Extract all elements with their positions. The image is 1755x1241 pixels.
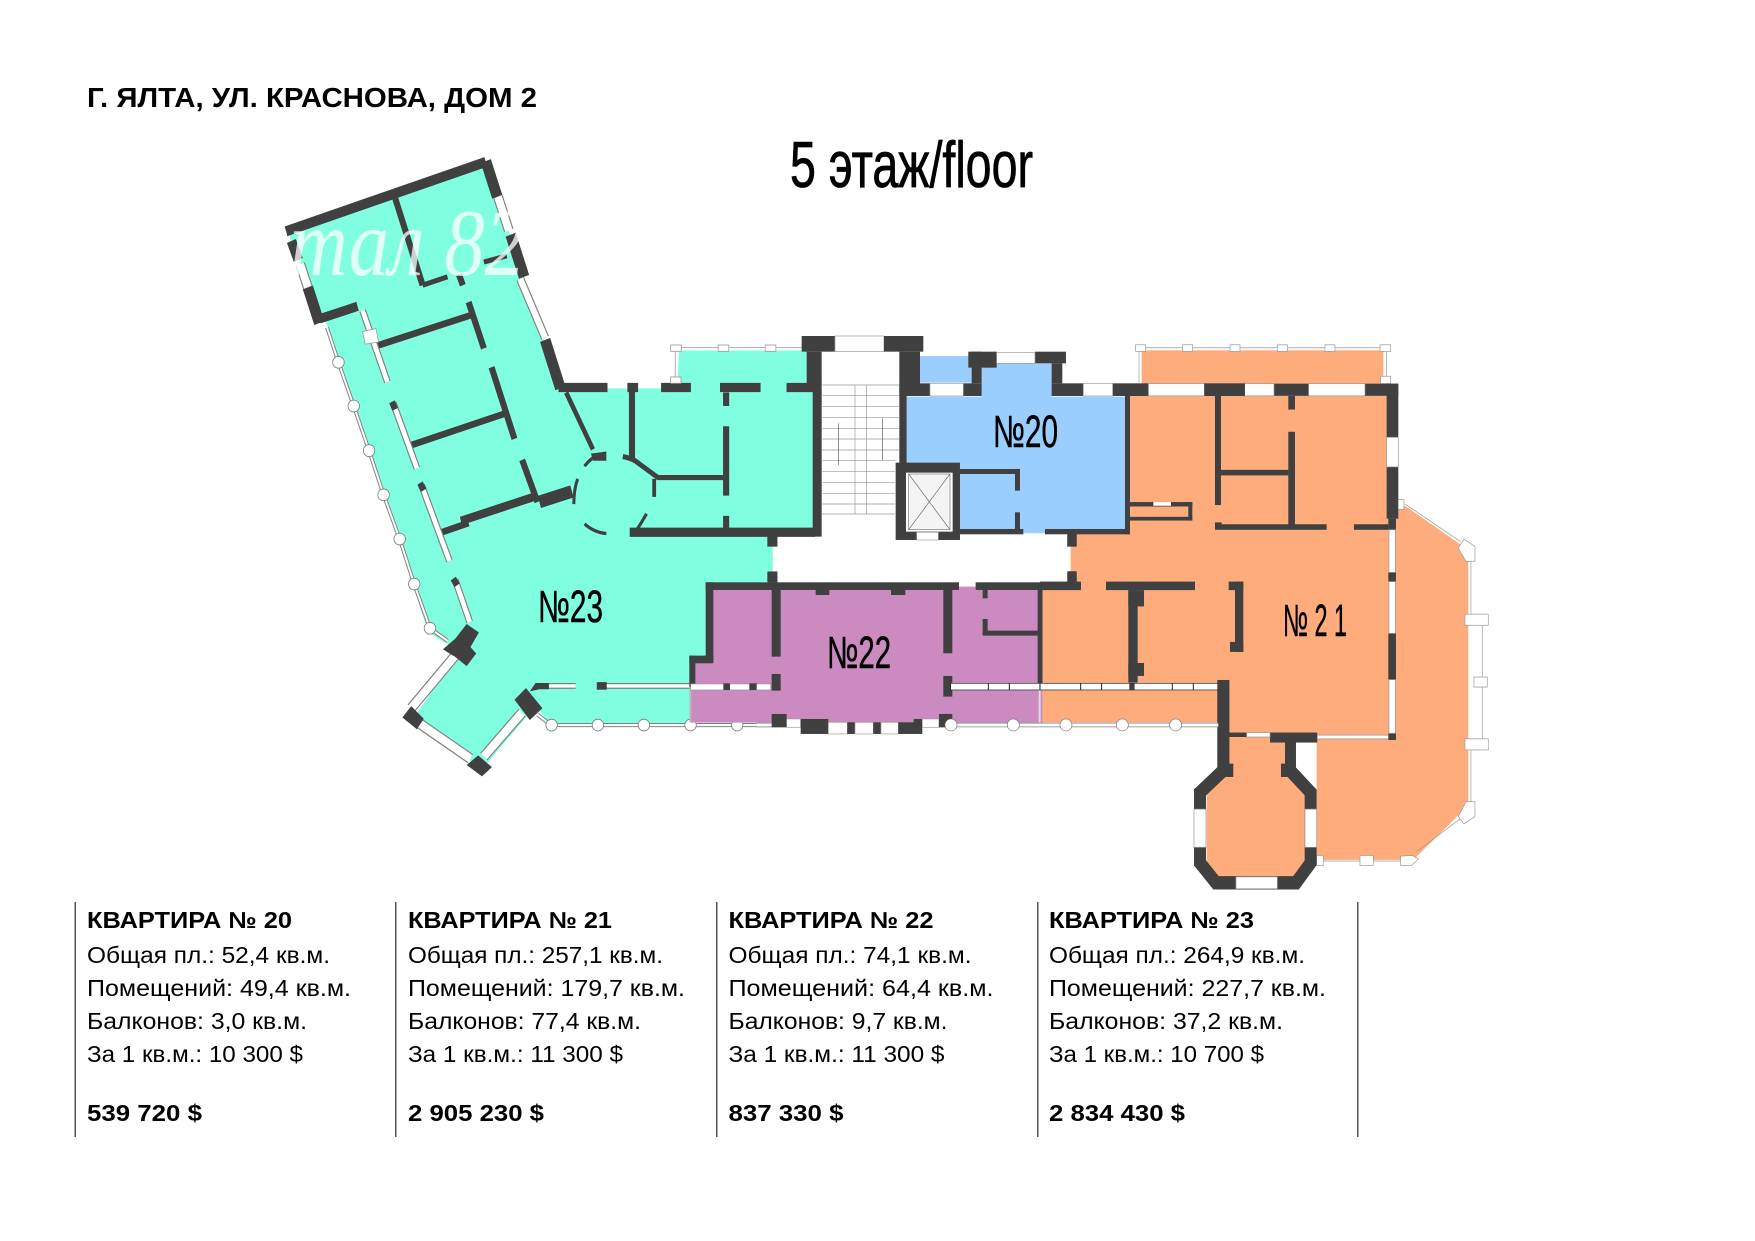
panel: apartment 23: Общая пл.: 264,9 кв.м. [1049, 942, 1305, 968]
bay window piers [402, 624, 549, 776]
panel: apartment 23: Балконов: 37,2 кв.м. [1049, 1008, 1283, 1034]
balcony railing with columns [327, 327, 773, 731]
corridor windows [691, 535, 1229, 770]
panel: apartment 20: За 1 кв.м.: 10 300 $ [87, 1041, 303, 1067]
terrace railing [1136, 345, 1488, 865]
panel: apartment 20: Балконов: 3,0 кв.м. [87, 1008, 307, 1034]
windows: apartment 23 [300, 197, 691, 759]
panel: apartment 22: Помещений: 64,4 кв.м. [728, 975, 994, 1001]
apartment 22 plan [689, 537, 1081, 723]
panel: apartment 23: За 1 кв.м.: 10 700 $ [1049, 1041, 1264, 1067]
apartment 20 plan [899, 336, 1245, 534]
title: address: Г. ЯЛТА, УЛ. КРАСНОВА, ДОМ 2 [87, 82, 537, 113]
long balcony railing [757, 718, 1218, 732]
upper balcony railing [671, 345, 802, 383]
panel: apartment 22: Балконов: 9,7 кв.м. [728, 1008, 948, 1034]
windows: apartment 20 [930, 352, 1113, 396]
columns [945, 719, 1182, 731]
walls: apartment 20 [899, 336, 1245, 534]
panel: apartment 21 [395, 902, 685, 1137]
panel: apartment 22: Общая пл.: 74,1 кв.м. [728, 942, 972, 968]
panel: apartment 23 [1037, 902, 1326, 1137]
panel: apartment 20: КВАРТИРА № 20 [87, 907, 292, 933]
stairwell [787, 336, 901, 537]
central bay piers and windows [772, 714, 952, 734]
floor plan [286, 161, 1488, 889]
panel: apartment 23: Помещений: 227,7 кв.м. [1049, 975, 1326, 1001]
closing divider [1357, 902, 1358, 1137]
apartment label 22: №22 [827, 627, 891, 678]
panel: apartment 20: 539 720 $ [87, 1100, 202, 1126]
panel: apartment 21: КВАРТИРА № 21 [408, 907, 612, 933]
apartment 23 plan [286, 161, 815, 776]
panel: apartment 22: За 1 кв.м.: 11 300 $ [728, 1041, 945, 1067]
panel: apartment 23: КВАРТИРА № 23 [1049, 907, 1254, 933]
panel: apartment 22 [716, 902, 994, 1137]
watermark: Капитал 82 [113, 190, 525, 296]
icon: elevator shaft [896, 463, 960, 540]
panel: apartment 22: 837 330 $ [728, 1100, 844, 1126]
panel: apartment 21: Помещений: 179,7 кв.м. [408, 975, 685, 1001]
apartment label 20: №20 [993, 406, 1058, 457]
panel: apartment 22: КВАРТИРА № 22 [728, 907, 934, 933]
windows: apartment 21 [1148, 384, 1398, 889]
walls: apartment 22 [689, 537, 1081, 697]
gallery front, stairwell and apartment 20 [691, 336, 1245, 770]
panel: apartment 20: Помещений: 49,4 кв.м. [87, 975, 351, 1001]
walls: apartment 21 [1040, 384, 1398, 767]
panel: apartment 21: Общая пл.: 257,1 кв.м. [408, 942, 663, 968]
panel: apartment 20 [74, 902, 351, 1137]
panel: apartment 23: 2 834 430 $ [1049, 1100, 1185, 1126]
panel: apartment 20: Общая пл.: 52,4 кв.м. [87, 942, 330, 968]
apartment 21 plan [1040, 345, 1488, 889]
heading: floor number: 5 этаж/floor [790, 128, 1033, 201]
apartment label 21: № 2 1 [1283, 595, 1347, 646]
panel: apartment 21: 2 905 230 $ [408, 1100, 544, 1126]
panel: apartment 21: Балконов: 77,4 кв.м. [408, 1008, 641, 1034]
octagonal bay [1200, 764, 1311, 883]
panel: apartment 21: За 1 кв.м.: 11 300 $ [408, 1041, 623, 1067]
apartment label 23: №23 [538, 581, 603, 632]
